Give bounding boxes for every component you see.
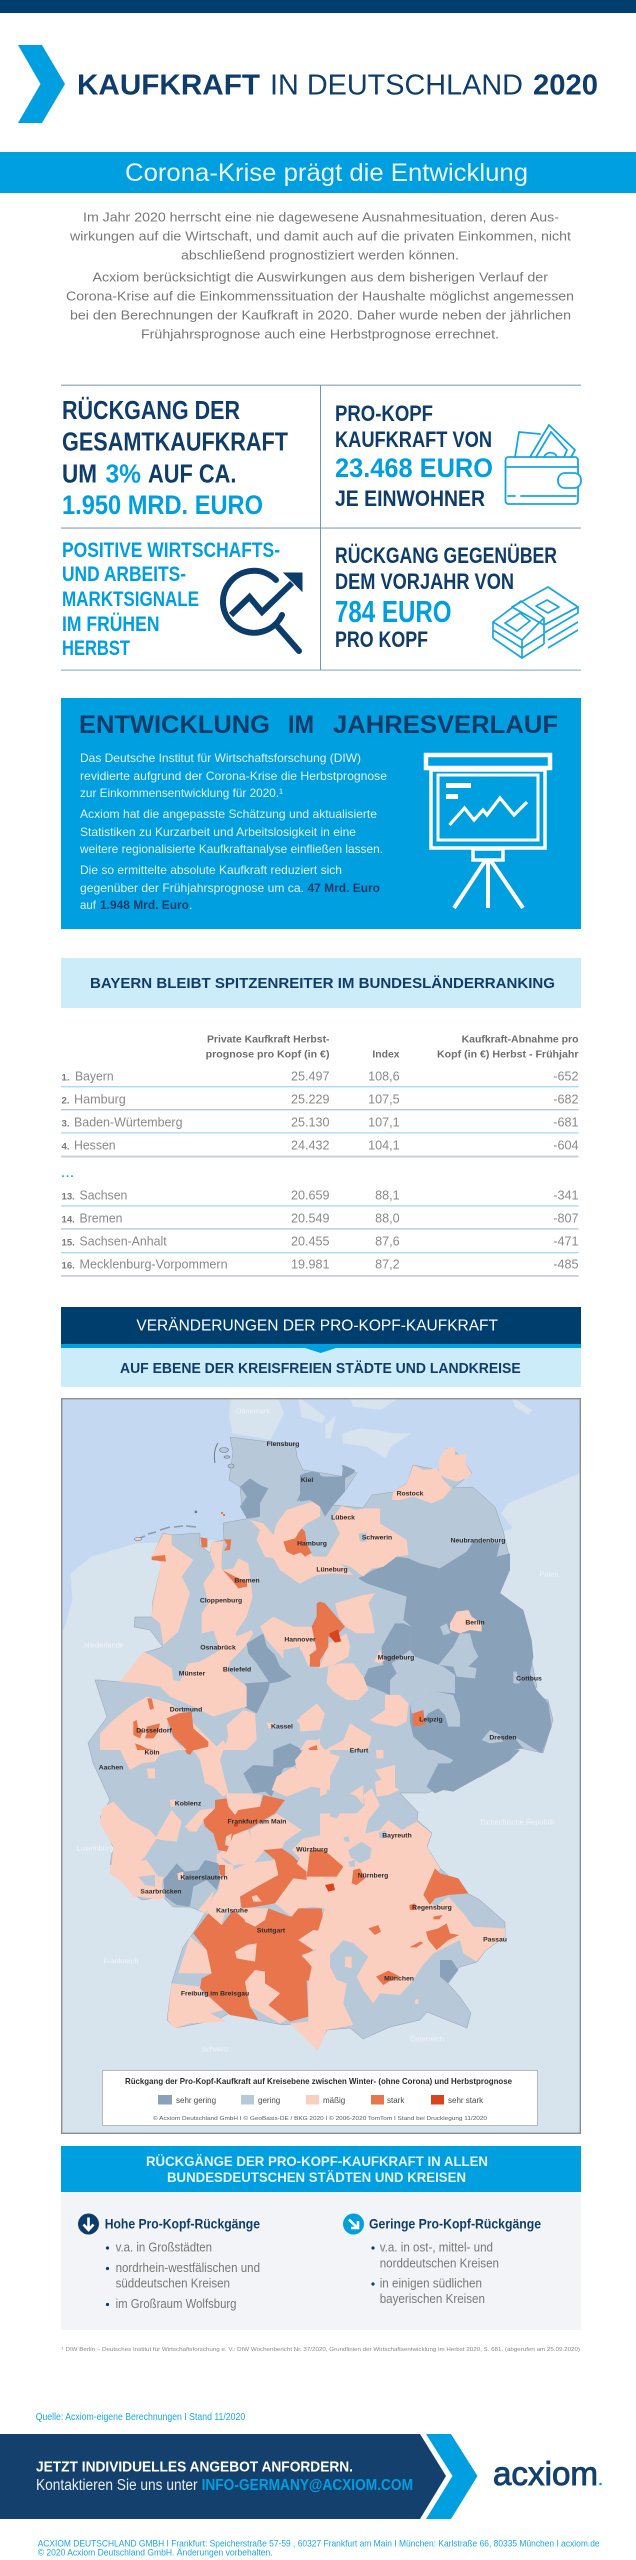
city labels: Passau <box>483 1936 507 1944</box>
stat: Rückgang gegenüber Vorjahr: DEM VORJAHR VON <box>335 569 514 594</box>
city labels: Cloppenburg <box>200 1598 242 1604</box>
table header: Index <box>372 1049 400 1060</box>
stat: Rückgang der Gesamtkaufkraft: UM <box>62 459 97 489</box>
body text: weitere regionalisierte Kaufkraftanalyse einfließen lassen. <box>79 842 383 856</box>
table rows: 20.455 <box>291 1235 330 1249</box>
country labels: Frankreich <box>104 1956 138 1966</box>
intro text <box>66 210 574 342</box>
icon: money stack <box>493 587 578 658</box>
city labels: Berlin <box>465 1620 485 1626</box>
table rows: Sachsen-Anhalt <box>80 1235 167 1249</box>
city labels: Karlsruhe <box>216 1908 248 1914</box>
body text <box>79 751 387 912</box>
table rows: 88,1 <box>375 1189 400 1203</box>
table rows: -485 <box>553 1258 578 1272</box>
southwest counties <box>100 1750 330 2028</box>
city labels: Schwerin <box>362 1534 392 1542</box>
heading: Veränderungen der Pro-Kopf-Kaufkraft <box>61 1307 581 1387</box>
city labels: Koblenz <box>175 1800 202 1808</box>
table rows: 25.229 <box>291 1093 330 1107</box>
city labels: Erfurt <box>350 1748 369 1754</box>
header: chevron and title <box>18 45 598 123</box>
city labels: Lübeck <box>331 1514 355 1522</box>
icon: down arrow <box>78 2214 99 2234</box>
map legend: mäßig <box>323 2096 345 2105</box>
icon: diagonal arrow <box>343 2214 364 2234</box>
table rules <box>61 1086 578 1277</box>
panel heading: RÜCKGÄNGE DER PRO-KOPF-KAUFKRAFT IN ALLEN <box>146 2153 488 2169</box>
intro text: Corona-Krise auf die Einkommenssituation der Haushalte möglichst angemessen <box>66 288 574 304</box>
city labels: Bielefeld <box>223 1666 251 1674</box>
city labels: Hamburg <box>297 1540 327 1548</box>
icon: wallet <box>506 425 581 504</box>
table rows: 19.981 <box>291 1258 330 1272</box>
country labels: Polen <box>540 1570 558 1578</box>
city labels: Cottbus <box>516 1676 542 1682</box>
intro text: bei den Berechnungen der Kaufkraft in 2020. Daher wurde neben der jährlichen <box>70 308 571 322</box>
stat: Rückgang der Gesamtkaufkraft: 1.950 MRD. EURO <box>62 490 263 520</box>
ranking table <box>61 1035 578 1277</box>
icon: presentation screen <box>426 755 550 908</box>
city labels: Regensburg <box>412 1904 452 1912</box>
table rows: Mecklenburg-Vorpommern <box>80 1258 228 1272</box>
table rows: 25.497 <box>291 1070 330 1084</box>
body text: 47 Mrd. Euro <box>308 881 380 895</box>
table header: Kaufkraft-Abnahme pro <box>462 1035 578 1046</box>
icon: header chevron <box>18 45 65 123</box>
map legend <box>102 2070 538 2126</box>
stat: Pro-Kopf Kaufkraft <box>335 401 493 511</box>
stat: positive Signale: MARKTSIGNALE <box>62 588 199 611</box>
panel: Entwicklung im Jahresverlauf <box>61 698 581 929</box>
table rows: 16. <box>62 1260 75 1272</box>
call to action banner: INFO-GERMANY@ACXIOM.COM <box>202 2477 413 2494</box>
heading: IM <box>288 711 314 739</box>
table rows: Bremen <box>80 1212 122 1226</box>
stat: Rückgang der Gesamtkaufkraft: 3% <box>106 459 141 489</box>
stat: Rückgang der Gesamtkaufkraft <box>62 395 288 520</box>
title <box>77 70 598 102</box>
heading <box>79 711 558 739</box>
city labels: Aachen <box>99 1764 123 1772</box>
stat: Pro-Kopf Kaufkraft: JE EINWOHNER <box>335 486 485 511</box>
call to action banner: Kontaktieren Sie uns unter <box>36 2477 198 2494</box>
stat: positive Signale: POSITIVE WIRTSCHAFTS- <box>62 539 280 562</box>
title: KAUFKRAFT <box>77 70 260 102</box>
body text: zur Einkommensentwicklung für 2020.¹ <box>80 786 283 800</box>
city labels: Stuttgart <box>257 1928 286 1934</box>
map legend: stark <box>387 2096 405 2105</box>
intro text: abschließend prognostiziert werden können. <box>181 248 459 262</box>
section band: Corona-Krise <box>0 152 636 193</box>
city labels: Nürnberg <box>358 1872 388 1880</box>
city labels: Düsseldorf <box>136 1728 172 1734</box>
table rows: 2. <box>62 1096 70 1107</box>
city labels: Münster <box>179 1670 206 1678</box>
band: Bundesländerranking <box>61 958 581 1008</box>
key figures grid <box>61 384 581 671</box>
table rows <box>62 1070 578 1272</box>
table rows: 24.432 <box>291 1138 330 1152</box>
northwest counties <box>100 1472 320 1750</box>
heading: Veränderungen der Pro-Kopf-Kaufkraft: AUF EBENE DER KREISFREIEN STÄDTE UND LANDKREISE <box>120 1360 521 1377</box>
city labels: Köln <box>144 1750 160 1756</box>
stat: positive Signale: UND ARBEITS- <box>62 563 186 586</box>
Germany base: gering <box>88 1437 553 2050</box>
body text: Statistiken zu Kurzarbeit und Arbeitslosigkeit in eine <box>80 825 356 839</box>
table rows: ... <box>62 1168 74 1180</box>
city labels: Kaiserslautern <box>180 1874 228 1882</box>
column: hohe Rückgänge: Hohe Pro-Kopf-Rückgänge <box>105 2216 260 2232</box>
city labels: Hannover <box>284 1636 316 1644</box>
North Sea islands <box>134 1443 234 1540</box>
column: geringe Rückgänge: Geringe Pro-Kopf-Rückgänge <box>369 2216 541 2232</box>
table rows: 20.659 <box>291 1189 330 1203</box>
body text: auf <box>80 898 97 912</box>
column: hohe Rückgänge: süddeutschen Kreisen <box>116 2276 230 2291</box>
table rows: -681 <box>553 1116 578 1130</box>
table rows: Sachsen <box>80 1189 127 1203</box>
stat: positive Signale <box>62 539 280 660</box>
table header: prognose pro Kopf (in €) <box>206 1049 330 1060</box>
call to action banner <box>0 2434 478 2519</box>
table rows: 15. <box>62 1238 75 1249</box>
table rows: -682 <box>553 1093 578 1107</box>
city labels: Kassel <box>271 1724 293 1730</box>
map legend: sehr stark <box>448 2096 484 2105</box>
stat: positive Signale: HERBST <box>62 637 130 660</box>
company footer: © 2020 Acxiom Deutschland GmbH. Änderungen vorbehalten. <box>38 2548 273 2558</box>
country labels: Dänemark <box>236 1406 270 1416</box>
map: Germany by Kreis <box>61 1397 584 2134</box>
table rows: Bayern <box>75 1070 114 1084</box>
city labels: Flensburg <box>267 1441 299 1448</box>
table rows: Hamburg <box>74 1093 126 1107</box>
stat: Rückgang gegenüber Vorjahr: RÜCKGANG GEGENÜBER <box>335 543 557 568</box>
city labels: Rostock <box>397 1490 424 1498</box>
country labels: Österreich <box>410 2034 444 2044</box>
city labels: München <box>384 1976 414 1982</box>
intro text: wirkungen auf die Wirtschaft, und damit auch auf die privaten Einkommen, nicht <box>69 228 571 244</box>
footnote: ¹ DIW Berlin – Deutsches Institut für Wirtschaftsforschung e. V.: DIW Wochenbericht Nr. 37/2020, Grundlinien der Wirtschaftsentwicklung im Herbst 2020, S. 681. (abgerufen am 25.09.2020) <box>62 2347 580 2353</box>
table rows: 108,6 <box>368 1070 400 1084</box>
table rows: -341 <box>553 1189 578 1203</box>
table header: Kopf (in €) Herbst - Frühjahr <box>437 1049 578 1060</box>
city labels: Kiel <box>301 1477 313 1484</box>
city labels: Magdeburg <box>378 1654 414 1662</box>
top bar <box>0 0 636 13</box>
stat: Rückgang der Gesamtkaufkraft: RÜCKGANG DER <box>62 395 240 425</box>
stat: Rückgang der Gesamtkaufkraft: GESAMTKAUFKRAFT <box>62 427 288 457</box>
body text: Das Deutsche Institut für Wirtschaftsforschung (DIW) <box>80 751 361 765</box>
column: geringe Rückgänge: v.a. in ost-, mittel- und <box>380 2240 493 2255</box>
city labels: Saarbrücken <box>140 1888 182 1896</box>
table rows: 88,0 <box>375 1212 400 1226</box>
panel heading: BUNDESDEUTSCHEN STÄDTEN UND KREISEN <box>167 2169 466 2185</box>
section band: Corona-Krise: Corona-Krise prägt die Entwicklung <box>125 159 528 187</box>
city labels: Bremen <box>234 1578 260 1584</box>
stat: Rückgang gegenüber Vorjahr: PRO KOPF <box>335 627 428 652</box>
country labels: Luxemburg <box>77 1844 113 1852</box>
intro text: Im Jahr 2020 herrscht eine nie dagewesene Ausnahmesituation, deren Aus- <box>83 210 559 224</box>
southeast counties <box>290 1750 520 2050</box>
table rows: 107,5 <box>368 1093 400 1107</box>
city labels: Neubrandenburg <box>451 1538 505 1544</box>
sea and neighbouring land <box>61 1397 584 1630</box>
company footer: ACXIOM DEUTSCHLAND GMBH I Frankfurt: Speicherstraße 57-59 , 60327 Frankfurt am Main I München: Karlstraße 66, 80335 München I acxiom.de <box>38 2539 600 2549</box>
heading: JAHRESVERLAUF <box>333 711 558 739</box>
city labels: Bayreuth <box>382 1832 412 1840</box>
table header <box>206 1035 578 1060</box>
city labels: Dresden <box>489 1734 517 1742</box>
city labels: Würzburg <box>296 1846 328 1854</box>
table rows: 4. <box>62 1141 70 1152</box>
title: IN DEUTSCHLAND <box>270 70 523 102</box>
city labels: Lüneburg <box>316 1566 348 1574</box>
column: hohe Rückgänge: im Großraum Wolfsburg <box>116 2296 236 2311</box>
city labels: Osnabrück <box>200 1644 236 1652</box>
icon: magnifier with rising arrow <box>223 571 302 651</box>
table header: Private Kaufkraft Herbst- <box>207 1035 330 1046</box>
body text: 1.948 Mrd. Euro <box>100 898 189 912</box>
stat: Rückgang der Gesamtkaufkraft: AUF CA. <box>148 459 236 489</box>
column: hohe Rückgänge: nordrhein-westfälischen und <box>116 2260 260 2275</box>
table rows: Hessen <box>74 1138 116 1152</box>
city labels: Dortmund <box>170 1706 202 1714</box>
body text: gegenüber der Frühjahrsprognose um ca. <box>80 881 304 895</box>
table rows: -471 <box>553 1235 578 1249</box>
logo: acxiom: acxiom <box>493 2455 598 2492</box>
column: hohe Rückgänge <box>78 2214 260 2311</box>
stat: positive Signale: IM FRÜHEN <box>62 613 160 636</box>
table rows: 104,1 <box>368 1138 400 1152</box>
city labels: Leipzig <box>419 1716 443 1724</box>
table rows: 3. <box>62 1119 70 1130</box>
heading: ENTWICKLUNG <box>79 711 270 739</box>
table rows: -652 <box>553 1070 578 1084</box>
stat: Pro-Kopf Kaufkraft: PRO-KOPF <box>335 401 433 426</box>
source line: Quelle: Acxiom-eigene Berechnungen I Stand 11/2020 <box>36 2412 246 2423</box>
panel heading <box>146 2153 488 2185</box>
table rows: 87,6 <box>375 1235 400 1249</box>
table rows: 87,2 <box>375 1258 400 1272</box>
map legend: © Acxiom Deutschland GmbH I © GeoBasis-DE / BKG 2020 I © 2006-2020 TomTom I Stand bei Drucklegung 11/2020 <box>153 2115 487 2122</box>
body text: revidierte aufgrund der Corona-Krise die Herbstprognose <box>80 769 387 783</box>
stat: Pro-Kopf Kaufkraft: KAUFKRAFT VON <box>335 427 492 452</box>
column: hohe Rückgänge: v.a. in Großstädten <box>116 2240 212 2255</box>
country labels: Niederlande <box>84 1640 124 1650</box>
heading: Veränderungen der Pro-Kopf-Kaufkraft: VERÄNDERUNGEN DER PRO-KOPF-KAUFKRAFT <box>136 1318 499 1335</box>
table rows: Baden-Würtemberg <box>74 1116 182 1130</box>
map legend: sehr gering <box>176 2096 216 2105</box>
body text: Die so ermittelte absolute Kaufkraft reduziert sich <box>80 863 342 877</box>
table rows: 14. <box>62 1215 75 1226</box>
band: Bundesländerranking: BAYERN BLEIBT SPITZENREITER IM BUNDESLÄNDERRANKING <box>90 975 555 992</box>
map legend: gering <box>258 2096 280 2105</box>
intro text: Acxiom berücksichtigt die Auswirkungen aus dem bisherigen Verlauf der <box>92 270 549 284</box>
northeast counties <box>300 1447 552 1758</box>
table rows: 1. <box>62 1073 70 1084</box>
city labels: Frankfurt am Main <box>228 1818 286 1826</box>
body text: Acxiom hat die angepasste Schätzung und aktualisierte <box>80 807 377 821</box>
column: geringe Rückgänge: bayerischen Kreisen <box>380 2291 485 2306</box>
table rows: 107,1 <box>368 1116 400 1130</box>
column: geringe Rückgänge: in einigen südlichen <box>380 2276 482 2291</box>
map legend: Rückgang der Pro-Kopf-Kaufkraft auf Kreisebene zwischen Winter- (ohne Corona) und Herbstprognose <box>125 2077 512 2086</box>
stat: Rückgang gegenüber Vorjahr: 784 EURO <box>335 594 452 629</box>
table rows: 13. <box>62 1192 75 1203</box>
city labels <box>99 1441 542 1998</box>
title: 2020 <box>533 70 598 102</box>
city labels: Freiburg im Breisgau <box>181 1990 249 1998</box>
body text: . <box>189 898 192 912</box>
stat: Rückgang gegenüber Vorjahr <box>335 543 557 652</box>
table rows: 20.549 <box>291 1212 330 1226</box>
panel: Rückgänge in allen Städten und Kreisen <box>61 2146 581 2330</box>
country labels: Schweiz <box>201 2044 229 2054</box>
table rows: -604 <box>553 1138 578 1152</box>
country labels <box>77 1406 558 2054</box>
column: geringe Rückgänge <box>343 2214 541 2306</box>
table rows: 25.130 <box>291 1116 330 1130</box>
table rows: -807 <box>553 1212 578 1226</box>
call to action banner: JETZT INDIVIDUELLES ANGEBOT ANFORDERN. <box>36 2459 353 2476</box>
stat: Pro-Kopf Kaufkraft: 23.468 EURO <box>335 453 493 483</box>
country labels: Tschechische Republik <box>479 1818 555 1826</box>
intro text: Frühjahrsprognose auch eine Herbstprognose errechnet. <box>141 326 499 342</box>
column: geringe Rückgänge: norddeutschen Kreisen <box>380 2256 499 2271</box>
company footer <box>38 2539 600 2558</box>
